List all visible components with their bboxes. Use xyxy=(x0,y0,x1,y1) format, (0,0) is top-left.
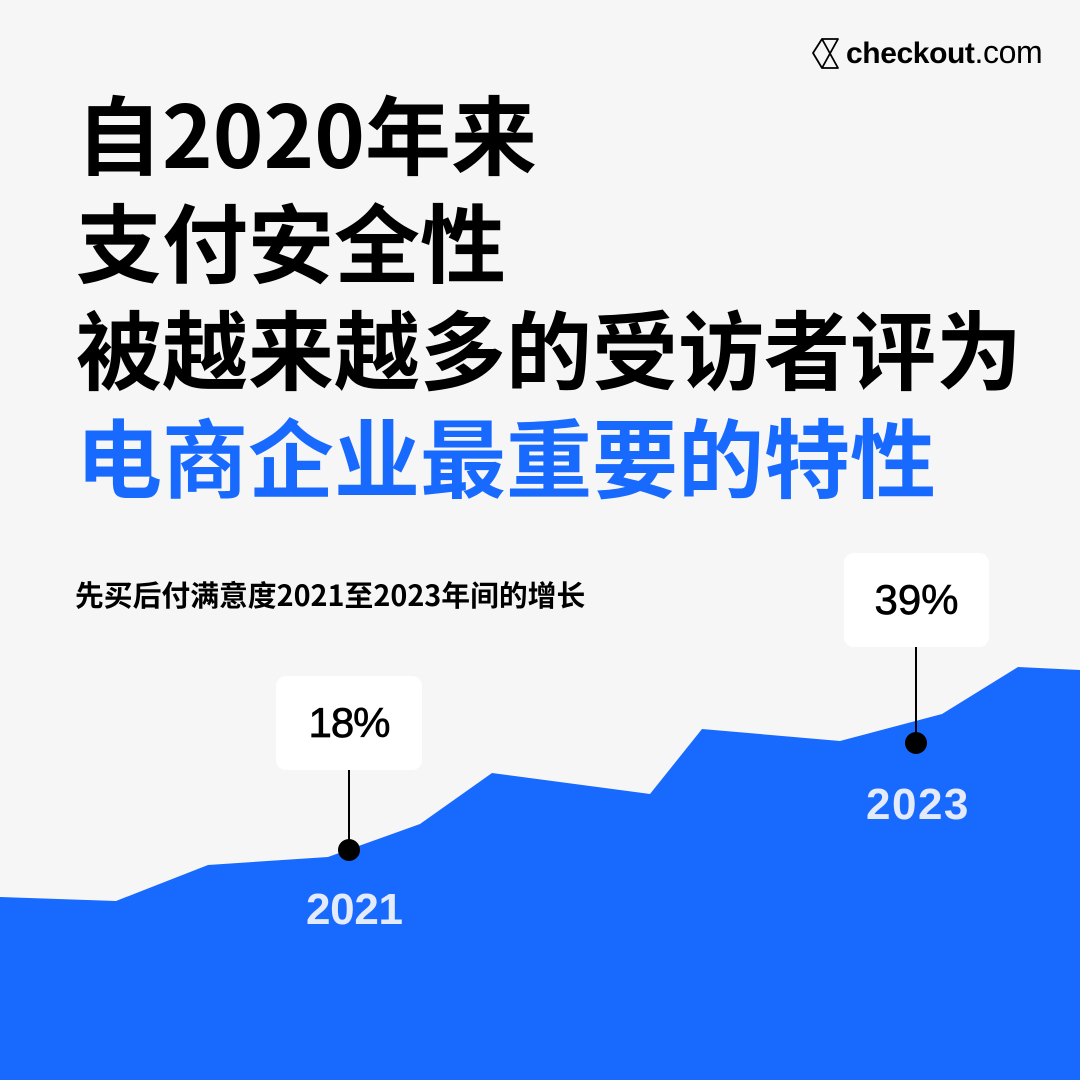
logo xyxy=(812,34,1042,70)
year label 2021: 2021 xyxy=(306,885,403,934)
year label 2023: 2023 xyxy=(866,780,970,829)
title line 4, highlighted: 电商企业最重要的特性 xyxy=(76,391,936,516)
value box 39% xyxy=(844,553,989,647)
title line 2: 支付安全性 xyxy=(76,176,506,301)
marker: 2021 xyxy=(338,839,360,861)
connector line xyxy=(915,647,917,743)
connector line xyxy=(348,770,350,846)
marker: 2023 xyxy=(905,732,927,754)
chart subtitle: 先买后付满意度2021至2023年间的增长 xyxy=(75,574,585,615)
icon: hourglass logo xyxy=(812,38,839,69)
value box 18%: 18% xyxy=(308,699,390,746)
value box 18% xyxy=(276,676,422,770)
logo wordmark: checkout.com xyxy=(846,34,1042,70)
title xyxy=(76,68,1022,516)
title line 1: 自2020年来 xyxy=(76,68,537,193)
value box 39%: 39% xyxy=(874,576,959,623)
title line 3: 被越来越多的受访者评为 xyxy=(76,283,1022,408)
